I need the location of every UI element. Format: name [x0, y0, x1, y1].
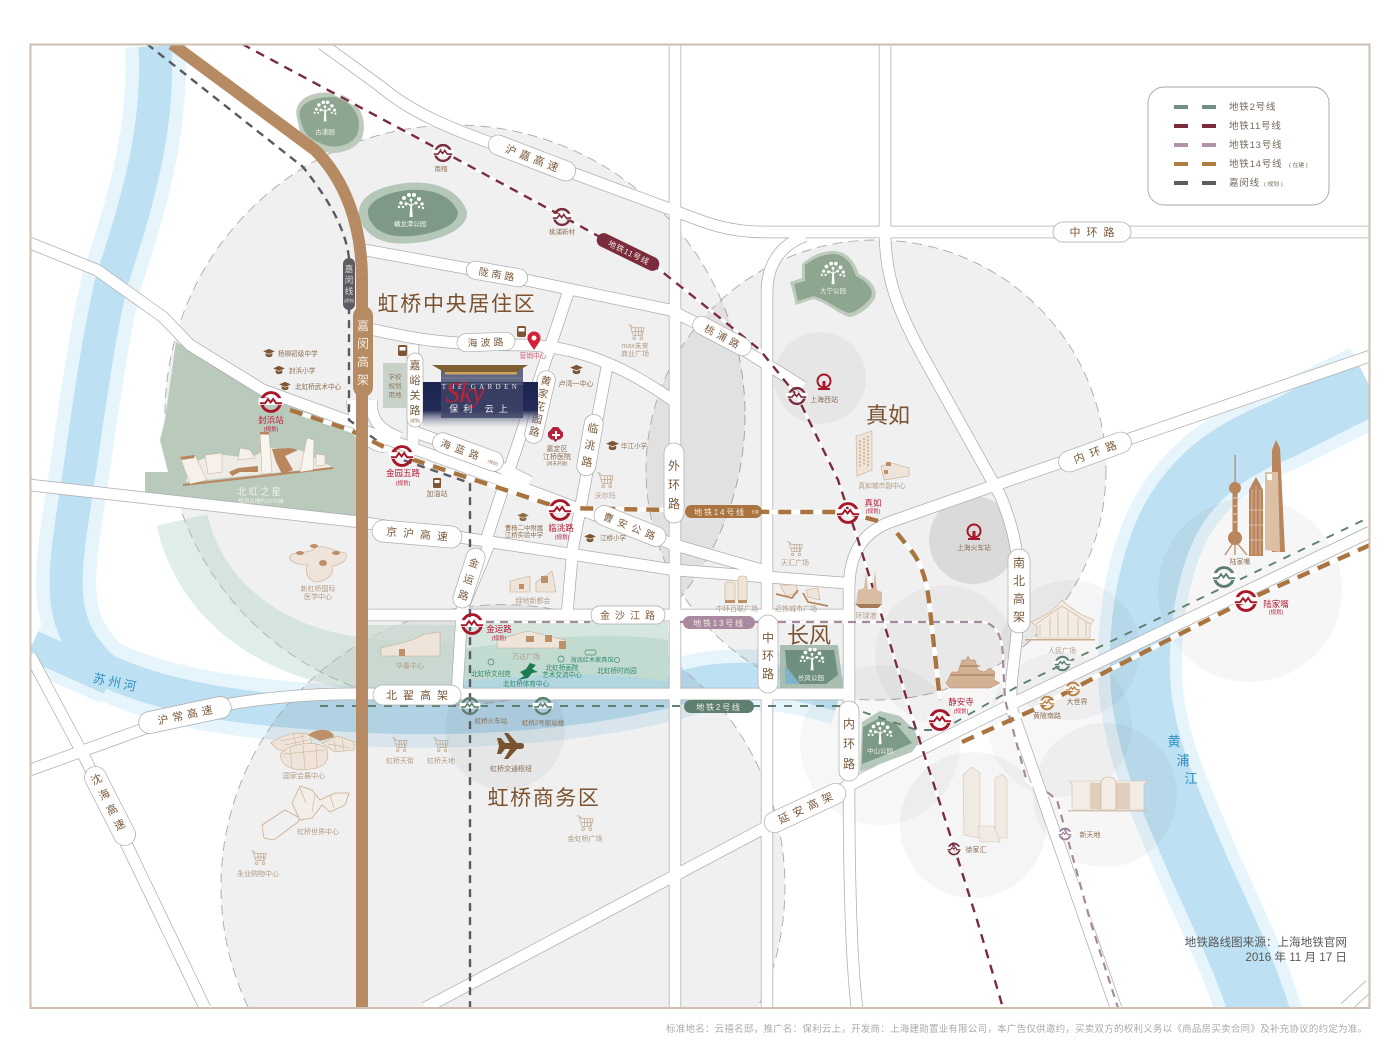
- park: Daning: 大宁公园: [820, 286, 846, 295]
- park: Changfeng: [780, 645, 843, 688]
- POI: Global Harbor: [855, 570, 882, 620]
- POI group: North Hongqiao green: 北虹桥时尚园: [597, 666, 637, 675]
- road label: Jinyun: 路: [456, 588, 471, 604]
- POI: Wanda: 万达广场: [512, 652, 540, 661]
- POI: schools left: 杨柳初级中学: [278, 349, 318, 358]
- road label: Inner Ring east: [1056, 429, 1134, 475]
- school land block: 规划: [388, 381, 402, 390]
- metro line 11: [242, 44, 1003, 1008]
- road label: Yan'an elevated: 延安高架: [776, 787, 840, 827]
- metro pill: line 13: 地铁13号线: [693, 618, 745, 628]
- station: Zhenru: (规划): [866, 507, 880, 515]
- station: Hongqiao Railway: 虹桥火车站: [475, 716, 508, 725]
- river: Suzhou Creek: [32, 46, 840, 718]
- road label: Taopu: 桃浦路: [702, 322, 745, 353]
- road label: Middle Ring vertical: [758, 615, 778, 693]
- metro pill: line 2: 地铁2号线: [696, 702, 742, 712]
- school land block: 学校: [388, 372, 402, 381]
- metro line 14: [290, 410, 1370, 742]
- station: Xintiandi: 新天地: [1080, 830, 1100, 839]
- station: Hongqiao T2: 虹桥2号航站楼: [522, 718, 565, 727]
- legend row: line 2: [1174, 101, 1276, 113]
- park: Zhongshan: 中山公园: [867, 746, 893, 755]
- POI: schools left: 北虹桥武术中心: [295, 382, 342, 391]
- POI group: North Hongqiao green: [471, 650, 637, 688]
- station: Jinyun Road: 金运路: [486, 624, 512, 634]
- POI: Max mall: [621, 325, 649, 358]
- district title: Changfeng: 长风: [787, 623, 831, 648]
- landmark: Jing'an Temple: [946, 656, 1000, 688]
- river name: Huangpu: 黄: [1167, 734, 1181, 749]
- POI: Hongqiao Tiandi: [427, 738, 455, 765]
- station: Shanghai Railway: 上海火车站: [957, 543, 991, 552]
- elevated road: Jiamin: [172, 44, 362, 1008]
- disclaimer: 标准地名：云禧名邸，推广名：保利云上，开发商：上海建勋置业有限公司，本广告仅供邀约，买卖双方的权利义务以《商品房买卖合同》及补充协议的约定为准。: [666, 1023, 1367, 1035]
- park: Zhongshan: [860, 711, 922, 772]
- POI: Max mall: 商业广场: [621, 349, 649, 358]
- label: Jiamin elevated: 嘉: [357, 319, 369, 333]
- road label: Hujia expressway: 沪嘉高速: [503, 141, 564, 176]
- station: Jinyuan 5th Road: [386, 447, 420, 487]
- metro line 2: [320, 517, 1370, 730]
- station: Dashijie: 大世界: [1066, 697, 1088, 706]
- metro pill: line 14: [685, 505, 762, 518]
- metro pill: line 14: 地铁14号线: [694, 507, 746, 517]
- road label: Shenhai: 速: [112, 817, 128, 833]
- POI: Max mall: max未来: [621, 341, 649, 350]
- legend row: line 2: 地铁2号线: [1229, 101, 1276, 113]
- river name: Huangpu: [1167, 734, 1198, 786]
- station: Fengbang: 封浜站: [258, 415, 284, 425]
- station: Shanghai West: 上海西站: [810, 395, 838, 404]
- POI: Caoyang school: 曹杨二中附属: [505, 523, 543, 532]
- park: Daning: [790, 251, 876, 317]
- station: Lintao Road: 临洮路: [548, 523, 574, 533]
- road label: Haibo: [457, 332, 515, 352]
- legend row: line 13: 地铁13号线: [1229, 139, 1282, 151]
- metro pill: line 11: 地铁11号线: [606, 238, 651, 267]
- label: Jiamin line: 线: [345, 286, 354, 296]
- district title: Zhenru: 真如: [866, 403, 910, 428]
- landmark: medical center: 医学中心: [304, 592, 332, 601]
- POI: Hospital: [543, 427, 571, 467]
- station: Huangpi South: [1033, 697, 1061, 720]
- park: Guyang: 古漾园: [315, 127, 335, 136]
- POI: Hongqiao Tianjie: 虹桥天街: [386, 756, 414, 765]
- landmark: Zhenru sub-center: 真如城市副中心: [858, 481, 906, 490]
- station: Fengbang: (规划): [264, 425, 278, 433]
- road label: Huangjia Huayuan: 黄: [539, 374, 553, 389]
- icon: bus stops: [398, 326, 526, 356]
- metro pill: line 11: [594, 231, 662, 273]
- green zone: North Hongqiao: [145, 342, 358, 521]
- POI group: North Hongqiao green: 艺术交流中心: [542, 670, 582, 679]
- road label: Jiayuguan: 峪: [410, 374, 420, 387]
- station: Jing'an: [928, 697, 974, 729]
- POI group: North Hongqiao green: 海派红木家具馆: [570, 656, 614, 664]
- road label: Lintao: 路: [580, 455, 594, 470]
- landmark: National Exhibition: [271, 730, 354, 780]
- POI: Luwan One: [558, 365, 594, 388]
- POI group: North Hongqiao green: 北虹桥画院: [546, 663, 579, 672]
- POI: Hospital: 嘉定区: [546, 444, 568, 453]
- legend row: Jiamin: [1174, 177, 1283, 189]
- road label: Jinghu: [371, 519, 463, 549]
- river name: Huangpu: 浦: [1176, 753, 1190, 768]
- road label: Jiayuguan: [407, 353, 423, 427]
- road label: Jiayuguan: 路: [410, 404, 420, 417]
- station: Nanxiang: [433, 145, 453, 173]
- legend row: Jiamin: ( 规划 ): [1264, 180, 1283, 188]
- park: Panlong: [359, 182, 467, 244]
- station: Zhenru: 真如: [864, 498, 882, 508]
- POI: Bailian: [716, 576, 758, 613]
- POI: Huajiang: 华江小学: [621, 441, 648, 450]
- POI group: North Hongqiao green: 北虹桥体育中心: [503, 679, 549, 688]
- school land block: [383, 363, 407, 408]
- POI: Jinhongqiao: 金虹桥广场: [568, 834, 602, 843]
- station: People's Square: [1054, 657, 1071, 670]
- station: Jinyun Road: (规划): [492, 634, 506, 642]
- road label: Shenhai: 高: [104, 801, 120, 818]
- label: Jiamin elevated: 高: [357, 354, 369, 369]
- label: Jiamin line: 闵: [345, 275, 353, 285]
- road label: Hailan: 海蓝路: [439, 437, 486, 464]
- road label: Shenhai: 海: [96, 786, 112, 803]
- road label: Jinyun: 金: [467, 555, 481, 571]
- road label: Shenhai: [81, 763, 139, 849]
- POI: Global Harbor: 环球港: [856, 611, 876, 620]
- station: Taopu Xincun: 桃浦新村: [549, 227, 576, 236]
- POI: Caoyang school: [505, 513, 544, 539]
- road label: Lintao: 洮: [583, 438, 596, 453]
- station: Xintiandi: [1058, 777, 1148, 840]
- road label: Taopu: [690, 313, 754, 359]
- district title: Hongqiao central: 虹桥中央居住区: [378, 293, 536, 316]
- district circle: Hongqiao business: [221, 605, 785, 1007]
- road label: Middle Ring vertical: 环: [762, 649, 774, 663]
- road label: Beizhai: [373, 685, 461, 705]
- legend row: line 13: [1174, 139, 1282, 151]
- icon: plane hub: [490, 733, 532, 773]
- POI: Hospital: (尚未开放): [546, 460, 568, 467]
- road label: Inner Ring vertical: 内: [843, 717, 855, 731]
- river name: Suzhou Creek: 苏州河: [92, 670, 140, 695]
- school land block: 用地: [388, 390, 402, 399]
- road label: Lintao: [575, 413, 605, 477]
- landmark: Hongqiao World Center: 虹桥世界中心: [297, 827, 339, 836]
- station: Lintao Road: (规划): [555, 533, 569, 541]
- road label: Huangjia Huayuan: 家: [536, 386, 550, 401]
- station: Lujiazui line 14: (规划): [1269, 608, 1283, 616]
- landmark: Hongqiao World Center: [262, 786, 349, 840]
- road label: Haibo: 海波路: [467, 335, 507, 350]
- road label: Longnan: 陇南路: [478, 265, 518, 284]
- road label: Beizhai: 北翟高架: [386, 688, 454, 702]
- station: Jing'an: 静安寺: [948, 697, 974, 707]
- source note: 地铁路线图来源：上海地铁官网: [1185, 935, 1347, 949]
- project visual: Poly The Sky Garden: [423, 365, 538, 428]
- station: Lujiazui line 14: 陆家嘴: [1263, 599, 1289, 609]
- project visual: Poly The Sky Garden: 保利 云上: [449, 403, 513, 414]
- road label: Middle Ring top: [1053, 222, 1131, 242]
- POI: gas station: 加油站: [426, 489, 448, 498]
- metro pill: line 2: [684, 700, 754, 713]
- road label: North-South elevated: 高: [1013, 591, 1025, 606]
- road label: Jiayuguan: (规划): [410, 417, 421, 423]
- river: Huangpu: [1140, 385, 1369, 1020]
- POI: Yongye: [237, 851, 279, 878]
- POI: schools left: [263, 349, 342, 391]
- landmark: Beihong Star skyline: [180, 432, 333, 505]
- road label: Outer Ring: 环: [668, 478, 680, 492]
- landmark: Lujiazui skyline: 陆家嘴: [1230, 557, 1250, 566]
- POI: Jinhongqiao: [568, 816, 602, 843]
- marker: sales center: 营销中心: [519, 351, 547, 360]
- station: Jing'an: (规划): [954, 707, 968, 715]
- road label: Hailan: (规划): [487, 458, 500, 467]
- POI: Walmart: [594, 473, 616, 500]
- road label: Jinshajiang: [591, 606, 665, 624]
- POI: Kintetsu: 近铁城市广场: [775, 604, 817, 613]
- label: Jiamin line: 嘉: [345, 264, 353, 274]
- station: Dashijie: [1065, 683, 1088, 706]
- station: Lujiazui line 2: [1212, 568, 1236, 586]
- source note: [1185, 935, 1347, 964]
- road label: Middle Ring vertical: 中: [762, 630, 774, 645]
- road label: Shenhai: 沈: [88, 771, 104, 788]
- road label: North-South elevated: 南: [1013, 555, 1025, 570]
- district circle: Zhenru: [646, 240, 1106, 700]
- station: Jinyuan 5th Road: 金园五路: [386, 468, 420, 478]
- landmark: Lujiazui skyline: [1225, 440, 1285, 566]
- station: Hongqiao Railway: [460, 698, 508, 725]
- park: Panlong: 蟠龙潭公园: [394, 219, 426, 228]
- legend row: line 14: [1174, 158, 1308, 170]
- POI: Caoyang school: 江桥实验中学: [505, 530, 544, 539]
- station: Lujiazui line 14: [1234, 592, 1289, 616]
- station: Xujiahui: 徐家汇: [966, 845, 986, 854]
- station: Xujiahui: [947, 767, 1007, 854]
- station: Huangpi South: 黄陂南路: [1033, 711, 1061, 720]
- POI: Walmart: 沃尔玛: [594, 491, 616, 500]
- metro pill: line 14: 在建: [751, 509, 759, 514]
- road label: Jinyun: [450, 546, 488, 610]
- marker: sales center: [519, 332, 547, 360]
- road label: Huangjia Huayuan: [523, 369, 557, 445]
- road label: Inner Ring vertical: 路: [843, 756, 855, 771]
- landmark: Beihong Star skyline: 北虹之星: [237, 486, 283, 498]
- station: Shanghai Railway: [957, 524, 991, 552]
- landmark: medical center: 新虹桥国际: [300, 584, 336, 593]
- road label: Huchang: 沪常高速: [156, 701, 218, 728]
- station: Lintao Road: [548, 501, 574, 541]
- district title: Hongqiao business: 虹桥商务区: [488, 787, 600, 810]
- label: Jiamin line: [343, 258, 355, 310]
- label: Jiamin elevated: 架: [357, 373, 369, 387]
- metro pill: line 13: [683, 616, 755, 629]
- POI: Jiangqiao primary: [584, 533, 626, 542]
- station: Nanxiang: 南翔: [434, 164, 448, 173]
- road label: Outer Ring: 外: [668, 459, 680, 473]
- icon: plane hub: 虹桥交通枢纽: [490, 764, 532, 773]
- POI: Greenland: [510, 571, 556, 605]
- label: Jiamin elevated: 闵: [357, 336, 369, 351]
- station: Zhenru: [836, 498, 882, 522]
- POI: Hongqiao Tianjie: [386, 738, 414, 765]
- road label: Yan'an elevated: [761, 780, 849, 836]
- road label: Inner Ring vertical: 环: [843, 737, 855, 751]
- road label: Jinshajiang: 金沙江路: [600, 609, 660, 622]
- road label: Outer Ring: 路: [668, 496, 680, 511]
- road labels: [81, 132, 1134, 849]
- road label: Jinghu: 京沪高速: [386, 524, 454, 544]
- road label: Lintao: 临: [586, 420, 600, 436]
- legend row: line 14: 地铁14号线: [1229, 158, 1282, 170]
- road label: Longnan: [465, 260, 529, 288]
- station: Jinyun Road: [460, 615, 512, 642]
- project visual: Poly The Sky Garden: Sky: [446, 378, 485, 409]
- POI: Tianhui: 天汇广场: [781, 558, 809, 567]
- road label: Jinyun: 运: [462, 573, 476, 587]
- road label: Cao'an: 曹安公路: [601, 510, 662, 544]
- station: Hongqiao T2: [522, 698, 565, 727]
- POI: Wanda: [497, 631, 566, 661]
- road label: Cao'an: [591, 502, 669, 550]
- road label: Middle Ring top: 中环路: [1070, 226, 1120, 239]
- station halo circles: [445, 332, 1342, 898]
- landmark: People's Square: 人民广场: [1048, 646, 1076, 655]
- road label: Jiayuguan: 嘉: [410, 358, 420, 372]
- metro line 13: [472, 622, 1118, 1008]
- green belt: New Hongqiao: [182, 520, 670, 690]
- road label: North-South elevated: 北: [1013, 574, 1025, 588]
- road label: Huangjia Huayuan: 园: [531, 413, 544, 427]
- POI: Jiangqiao primary: 江桥小学: [600, 533, 626, 542]
- POI: Hospital: 江桥医院: [543, 452, 571, 461]
- POI: Luwan One: 卢湾一中心: [558, 379, 594, 388]
- river name: Huangpu: 江: [1184, 771, 1198, 786]
- road label: Hailan: [430, 430, 506, 474]
- label: Jiamin elevated: [353, 306, 373, 397]
- POI: schools left: 封浜小学: [289, 366, 316, 375]
- POI: Huajiang: [606, 441, 648, 450]
- road label: Middle Ring vertical: 路: [762, 666, 774, 681]
- POI: Huadong center: [381, 632, 440, 670]
- project visual: Poly The Sky Garden: THE GARDEN: [442, 383, 520, 391]
- legend row: Jiamin: 嘉闵线: [1229, 177, 1260, 189]
- park: Guyang: [296, 92, 364, 153]
- road label: Huchang: [137, 694, 233, 736]
- legend: [1148, 87, 1329, 205]
- landmark: medical center: [290, 544, 347, 601]
- POI: Hongqiao Tiandi: 虹桥天地: [427, 756, 455, 765]
- station: Fengbang: [258, 393, 284, 433]
- road label: Huangjia Huayuan: 路: [528, 424, 541, 439]
- POI group: North Hongqiao green: 北虹桥文创苑: [471, 669, 511, 678]
- district circle: Hongqiao central residential: [165, 125, 745, 705]
- source note: 2016 年 11 月 17 日: [1245, 950, 1347, 964]
- park: Changfeng: 长风公园: [798, 673, 824, 682]
- legend row: line 11: [1174, 120, 1282, 132]
- legend row: line 11: 地铁11号线: [1229, 120, 1282, 132]
- road label: Jiayuguan: 关: [410, 388, 420, 402]
- road label: North-South elevated: [1008, 549, 1030, 633]
- station: Shanghai West: [787, 374, 838, 404]
- metro Jiamin line: [147, 44, 470, 1008]
- POI: Huadong center: 华董中心: [396, 661, 424, 670]
- POI: Greenland: 绿地新都会: [516, 596, 550, 605]
- station: Jinyuan 5th Road: (规划): [396, 479, 410, 487]
- road label: Inner Ring east: 内环路: [1071, 436, 1124, 466]
- landmark: Zhenru sub-center: [856, 431, 909, 490]
- landmark: People's Square: [1025, 600, 1095, 655]
- landmark: National Exhibition: 国家会展中心: [283, 771, 325, 780]
- POI: Tianhui: [781, 542, 809, 567]
- landmark: Beihong Star skyline: 规划占地约2570亩: [238, 497, 284, 505]
- road label: Huangjia Huayuan: 花: [534, 399, 547, 414]
- POI: Yongye: 永业购物中心: [237, 869, 279, 878]
- POI: Kintetsu: [775, 585, 828, 613]
- road label: Outer Ring: [664, 443, 684, 523]
- label: Jiamin line: (规划): [344, 297, 355, 303]
- road label: North-South elevated: 架: [1013, 610, 1025, 624]
- station: Taopu Xincun: [549, 209, 576, 236]
- road label: Inner Ring vertical: [839, 701, 859, 781]
- POI: gas station: [426, 478, 448, 498]
- legend row: line 14: ( 在建 ): [1289, 161, 1308, 169]
- POI: Bailian: 中环百联广场: [716, 604, 758, 613]
- road label: Hujia expressway: [485, 132, 579, 184]
